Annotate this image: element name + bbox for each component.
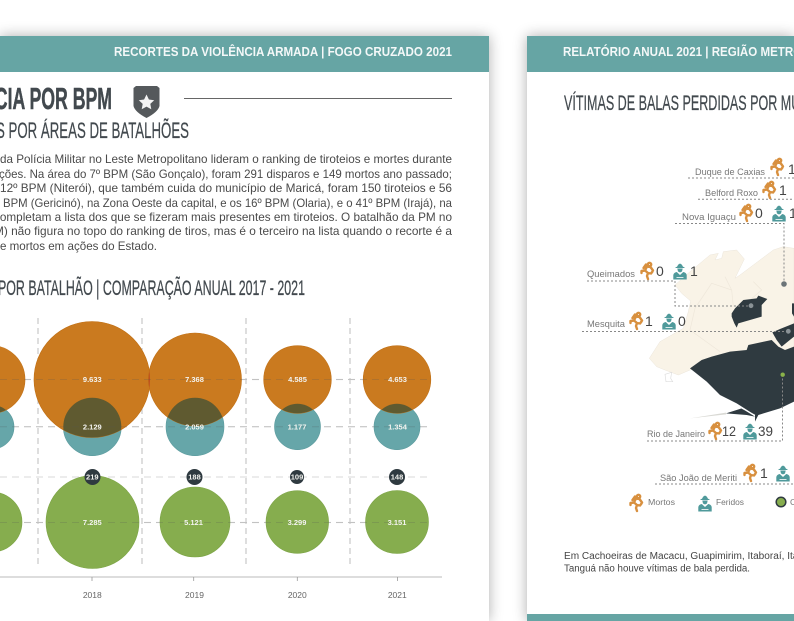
label: Mesquita: Mesquita [587, 319, 626, 330]
bubble values: 5.121 [184, 518, 203, 527]
green circles: deaths [0, 476, 428, 568]
x axis: 2019 [185, 590, 204, 600]
label: Queimados [587, 263, 698, 280]
bubble values: 188 [188, 472, 201, 482]
bubble values: 1.354 [388, 422, 408, 432]
label: Queimados: Queimados [587, 269, 635, 280]
bubble values: 2.059 [185, 422, 204, 432]
bubble values: 3.151 [388, 518, 406, 527]
label: Nova Iguaçu [682, 205, 794, 223]
dark circles [84, 469, 405, 485]
teal circles: injured [0, 398, 420, 456]
x axis: 2020 [288, 590, 307, 600]
map: metropolitan region [649, 247, 794, 422]
label: Rio de Janeiro: 12 [722, 423, 736, 439]
label: Mesquita: 1 [645, 313, 653, 329]
bubble values: 4.585 [288, 375, 307, 384]
label: São João de Meriti: 1 [760, 465, 768, 481]
label: Nova Iguaçu: Nova Iguaçu [682, 212, 736, 223]
text block: intro paragraph [0, 152, 452, 253]
right page footer band [527, 614, 794, 621]
label: Rio de Janeiro: Rio de Janeiro [647, 429, 705, 440]
label: Belford Roxo [705, 182, 787, 199]
text block: intro paragraph: M) não figura no topo do ranking de tiros, mas é o terceiro na lista quando o recorte é a [0, 224, 452, 238]
bubble values: 3.299 [288, 518, 306, 527]
text block: footnote: Tanguá não houve vítimas de bala perdida. [564, 564, 750, 574]
bubble values: 7.368 [185, 375, 204, 384]
bubble values: 109 [291, 472, 303, 482]
orange circles: shootings [0, 322, 431, 438]
right page header [527, 36, 794, 72]
circle overlaps [0, 371, 412, 438]
bubble values: 4.653 [388, 375, 407, 384]
x axis [0, 577, 442, 600]
label: Mesquita [587, 313, 686, 330]
text block: intro paragraph: e mortos em ações do Estado. [0, 239, 157, 253]
label: Belford Roxo: 1 [779, 182, 787, 198]
label: Rio de Janeiro [647, 423, 773, 440]
label: São João de Meriti [660, 465, 794, 484]
x axis: 2018 [83, 590, 102, 600]
left page header: RECORTES DA VIOLÊNCIA ARMADA | FOGO CRUZADO 2021 [114, 44, 452, 59]
label: Nova Iguaçu: 0 [755, 205, 763, 221]
label: Rio de Janeiro: 39 [758, 423, 773, 439]
text block: footnote [564, 551, 794, 574]
bubble values [83, 375, 408, 527]
chart heading: POR BATALHÃO | COMPARAÇÃO ANUAL 2017 - 2021 [0, 276, 305, 300]
icon: police badge [134, 86, 160, 118]
panel: right page background [527, 36, 794, 621]
label: Mesquita: 0 [678, 313, 686, 329]
legend: Mortos [648, 497, 675, 507]
label: Queimados: 1 [690, 263, 698, 279]
legend: Feridos [716, 497, 744, 507]
bubble values: 9.633 [83, 375, 102, 384]
text block: intro paragraph: completam a lista dos que se fizeram mais presentes em tiroteios. O batalhão da PM no [0, 210, 452, 224]
bubble values: 1.177 [288, 422, 306, 432]
label: Duque de Caxias [695, 159, 794, 178]
leader lines [582, 178, 794, 484]
text block: intro paragraph: da Polícia Militar no Leste Metropolitano lideram o ranking de tiroteios e mortes durante [0, 152, 452, 166]
text block: intro paragraph: BPM (Gericinó), na Zona Oeste da capital, e os 16º BPM (Olaria), e o 41º BPM (Irajá), na [3, 196, 452, 210]
text block: intro paragraph: ções. Na área do 7º BPM (São Gonçalo), foram 291 disparos e 149 mortos ano passado; [0, 167, 452, 181]
label: Queimados: 0 [656, 263, 664, 279]
bubble values: 2.129 [83, 422, 102, 432]
panel: left page background [0, 36, 489, 621]
bubble values: 7.285 [83, 518, 102, 527]
bubble values: 219 [86, 472, 99, 482]
legend [630, 495, 794, 512]
bubble chart: annual comparison [0, 318, 442, 600]
label: Belford Roxo: Belford Roxo [705, 188, 758, 199]
label: São João de Meriti: São João de Meriti [660, 473, 737, 484]
left page header [0, 36, 489, 72]
text block: intro paragraph: 12º BPM (Niterói), que também cuida do município de Maricá, foram 150 tiroteios e 56 [0, 181, 452, 195]
x axis: 2021 [388, 590, 407, 600]
bubble values: 148 [391, 472, 403, 482]
label: Duque de Caxias: Duque de Caxias [695, 167, 765, 178]
